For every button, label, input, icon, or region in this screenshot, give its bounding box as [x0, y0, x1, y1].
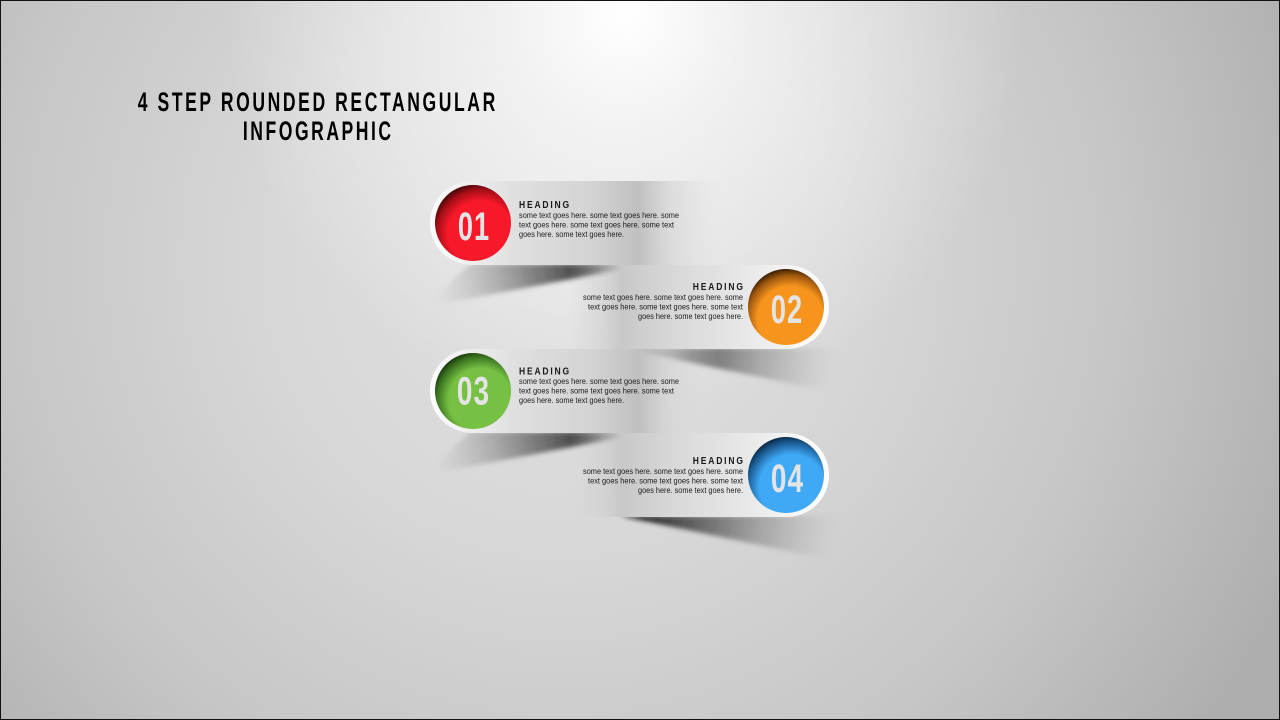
panel: step 3 band	[430, 349, 720, 433]
shadow: step 4	[620, 516, 835, 560]
text block: step 4: text goes here. some text goes here. some text	[588, 476, 744, 486]
text block: step 3	[519, 376, 679, 405]
text block: step 2: goes here. some text goes here.	[638, 311, 743, 321]
panel: step 4 band	[570, 433, 829, 517]
text block: step 1: some text goes here. some text goes here. some	[519, 210, 679, 220]
number 02: 02	[771, 288, 802, 332]
text block: step 1: goes here. some text goes here.	[519, 229, 624, 239]
title	[138, 86, 495, 146]
text block: step 4: some text goes here. some text goes here. some	[583, 466, 743, 476]
icon: step 4 circle	[748, 437, 824, 513]
step 3	[425, 349, 720, 475]
text block: step 4: goes here. some text goes here.	[638, 485, 743, 495]
text block: step 1	[519, 210, 679, 239]
panel: step 2 band	[570, 265, 829, 349]
icon: step 1 circle	[435, 185, 511, 261]
step 2	[570, 265, 835, 392]
icon: step 3 circle	[435, 353, 511, 429]
number 04: 04	[771, 457, 804, 501]
text block: step 3: goes here. some text goes here.	[519, 395, 624, 405]
title: INFOGRAPHIC	[243, 115, 391, 146]
title: 4 STEP ROUNDED RECTANGULAR	[138, 86, 495, 117]
heading: step 1: HEADING	[519, 200, 569, 210]
text block: step 3: some text goes here. some text goes here. some	[519, 376, 679, 386]
text block: step 2	[583, 292, 744, 321]
heading: step 2: HEADING	[693, 282, 743, 292]
number 03: 03	[457, 370, 489, 414]
text block: step 3: text goes here. some text goes here. some text	[519, 386, 675, 396]
text block: step 2: some text goes here. some text goes here. some	[583, 292, 743, 302]
step 1	[425, 181, 720, 307]
number 01: 01	[458, 205, 489, 249]
heading: step 3: HEADING	[519, 366, 569, 376]
step 4	[570, 433, 835, 560]
shadow: step 1	[425, 264, 650, 307]
text block: step 1: text goes here. some text goes here. some text	[519, 220, 675, 230]
panel: step 1 band	[430, 181, 720, 265]
shadow: step 2	[620, 348, 835, 392]
icon: step 2 circle	[748, 269, 824, 345]
text block: step 4	[583, 466, 744, 495]
shadow: step 3	[425, 432, 650, 475]
text block: step 2: text goes here. some text goes here. some text	[588, 302, 744, 312]
heading: step 4: HEADING	[693, 456, 743, 466]
